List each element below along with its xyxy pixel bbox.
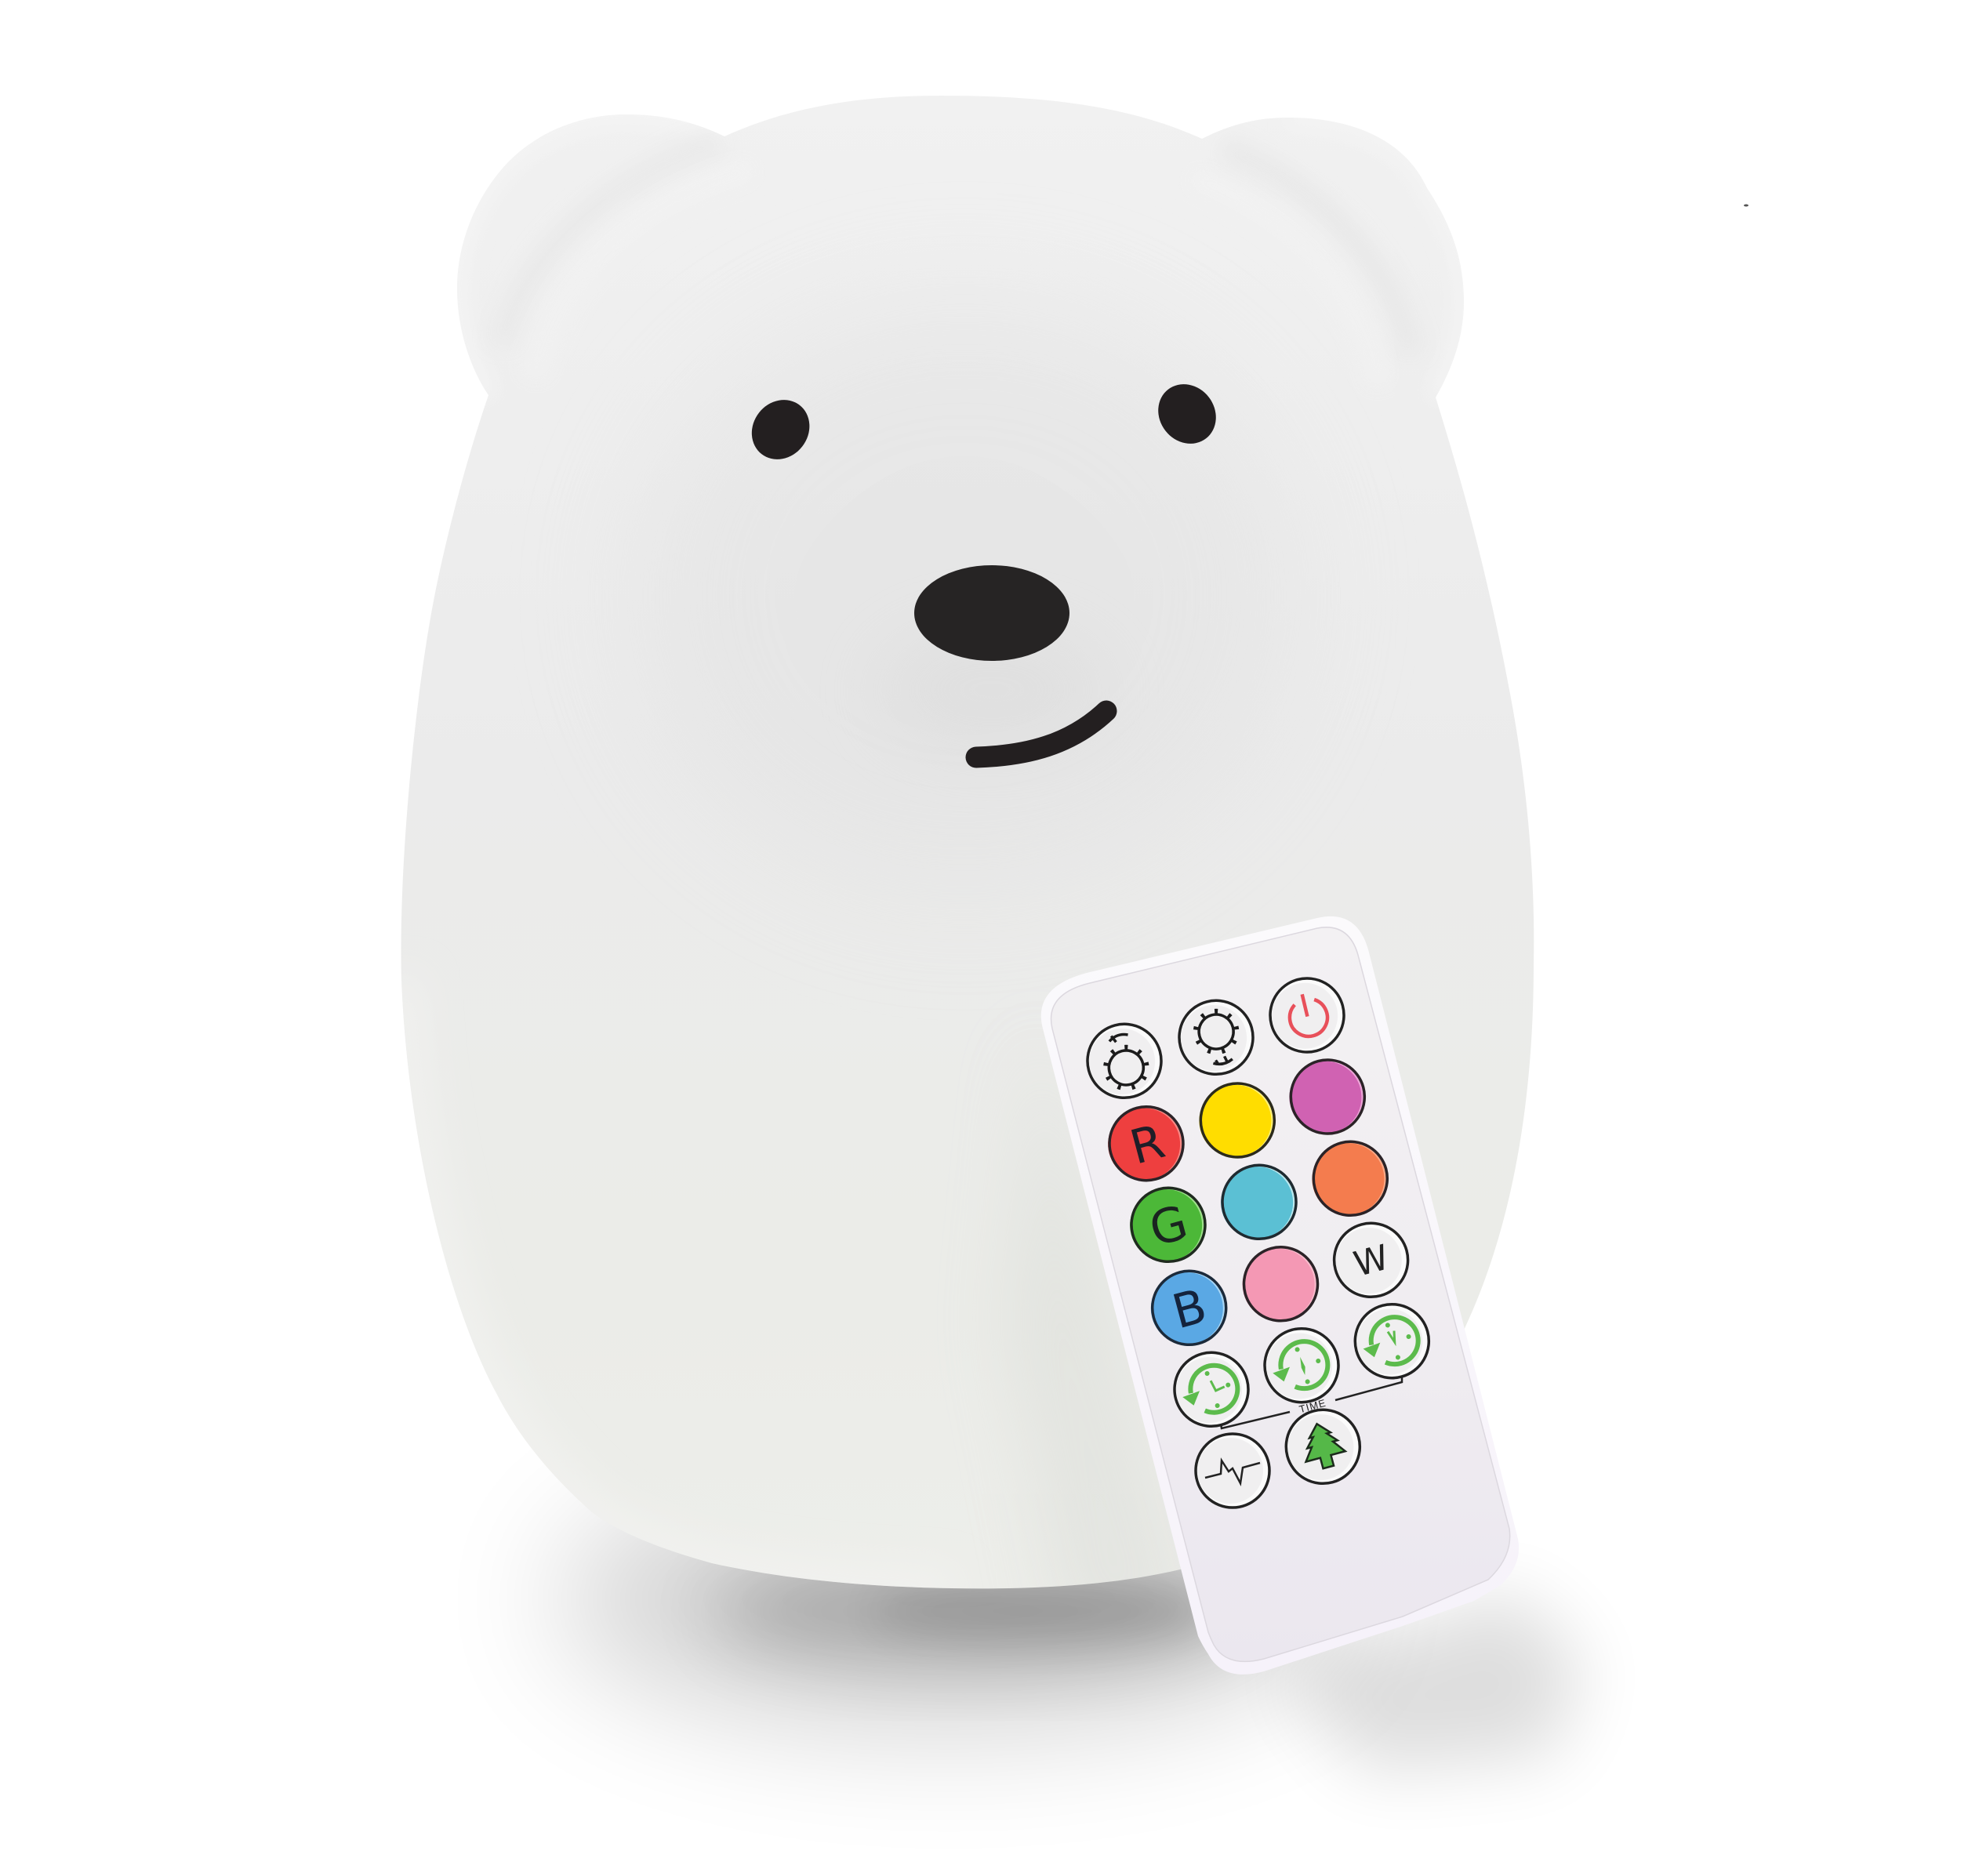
mouth (976, 711, 1106, 757)
speck (1744, 204, 1748, 207)
button: R: R (1124, 1114, 1171, 1176)
shadow: under bear and remote (557, 1466, 1584, 1772)
button: brightness up (1171, 992, 1262, 1083)
button: B: B (1167, 1279, 1212, 1340)
label: TIME: TIME (1298, 1397, 1327, 1415)
remote face panel (1051, 927, 1510, 1661)
button: pink (1234, 1239, 1326, 1330)
button: timer 3 (1347, 1296, 1437, 1386)
right eye (1146, 372, 1228, 455)
time bracket (1221, 1377, 1402, 1428)
button: tree (1278, 1402, 1368, 1492)
remote body rim (1041, 916, 1519, 1675)
button: timer 2 (1256, 1320, 1347, 1410)
button: G (1122, 1180, 1214, 1270)
bear lamp (401, 96, 1534, 1646)
button: timer 1 (1166, 1344, 1257, 1435)
button: pulse (1196, 1434, 1269, 1508)
button: W (1326, 1215, 1416, 1305)
button: teal (1213, 1157, 1305, 1247)
nose (914, 565, 1069, 661)
button: B (1142, 1263, 1234, 1353)
button: orange (1304, 1134, 1396, 1224)
button: yellow (1191, 1075, 1283, 1166)
button: W: W (1349, 1237, 1393, 1285)
remote control (1041, 916, 1519, 1675)
button: G: G (1144, 1195, 1193, 1257)
left eye (740, 388, 821, 471)
button: power (1262, 970, 1353, 1061)
button: R (1100, 1098, 1192, 1189)
bear body silhouette (401, 96, 1534, 1588)
button: brightness down (1079, 1016, 1170, 1106)
bear shading (751, 384, 1425, 1588)
button: purple (1281, 1051, 1373, 1142)
